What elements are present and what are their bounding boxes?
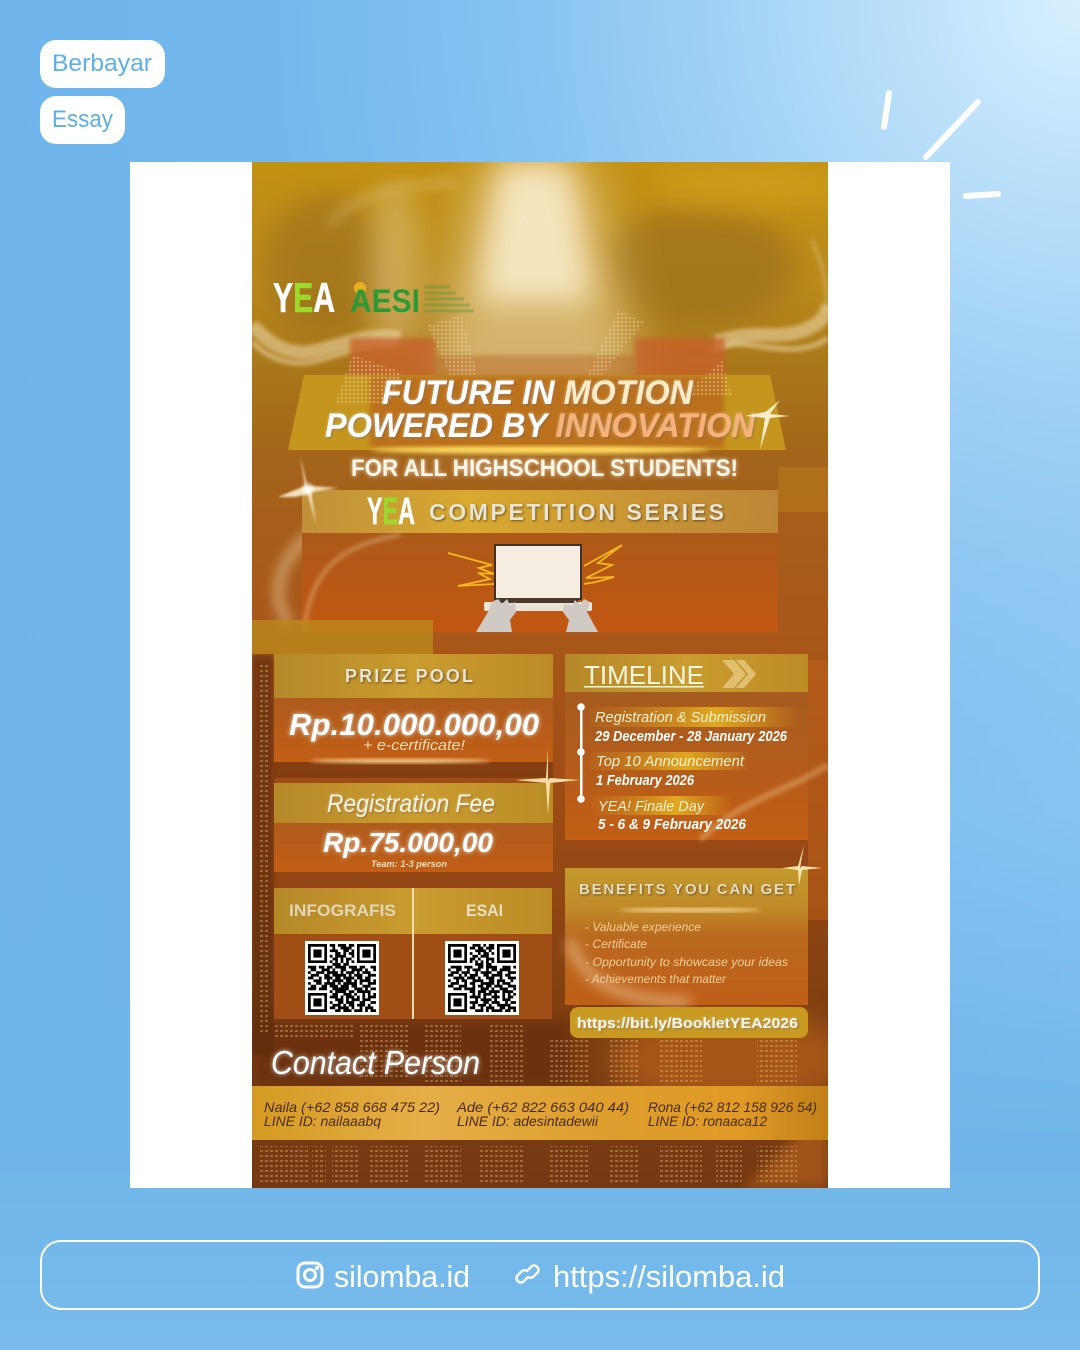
contact heading: Contact Person [271,1044,480,1081]
contact: Rona [648,1102,816,1126]
booklet link [570,1007,808,1038]
panel: prize pool [274,654,553,778]
icon: chevrons [722,660,756,688]
panel: competition series [302,490,778,632]
panel: timeline [565,654,828,840]
timeline entries: 29 December - 28 January 2026 [594,729,788,745]
tag: Essay: Essay [52,106,113,133]
poster background [252,161,850,1188]
tag: Essay [40,96,125,144]
booklet link: https://bit.ly/BookletYEA2026 [577,1015,798,1032]
contact: Naila: Naila (+62 858 668 475 22) [264,1099,440,1115]
contact: Rona: LINE ID: ronaaca12 [648,1113,767,1129]
dotted matrix pattern [258,665,797,1184]
logo: YEA: YEA [273,274,335,321]
halftone shapes behind title [348,310,728,375]
logo: AESI [350,282,474,312]
benefit list: - Opportunity to showcase your ideas [585,955,788,969]
tag: Berbayar [40,40,165,88]
icon: link [517,1266,538,1282]
contact: Ade [456,1102,628,1126]
url: https://silomba.id [553,1259,785,1294]
sparkles [278,400,822,885]
benefit list: - Achievements that matter [585,972,727,986]
timeline entries: Registration & Submission [595,709,766,726]
title text [324,378,757,440]
light beam [369,162,650,430]
panel: QR links: ESAI [466,901,503,920]
benefit list [585,920,788,986]
handle: silomba.id [334,1259,470,1294]
footer link bar [41,1241,1039,1309]
icon: laptop with hands [448,544,622,632]
panel: registration fee: Team: 1-3 person [371,859,447,869]
contact: Naila: LINE ID: nailaaabq [264,1113,381,1129]
title text: FUTURE IN MOTION [382,374,694,412]
logo: AESI: AESI [350,283,420,319]
QR code: infografis [305,941,379,1015]
panel: competition series: YEA [367,491,415,533]
icon: instagram [298,1263,322,1287]
timeline entries: YEA! Finale Day [598,798,705,815]
panel: timeline: TIMELINE [584,660,704,690]
panel: prize pool: PRIZE POOL [345,666,473,686]
left band [252,620,433,654]
contact: Ade: Ade (+62 822 663 040 44) [456,1099,629,1115]
panel: QR links [274,888,552,1019]
title banner [288,355,786,454]
highlight bars [590,707,800,815]
title text: POWERED BY INNOVATION [325,407,756,445]
timeline entries: 5 - 6 & 9 February 2026 [598,817,747,833]
timeline line [577,703,585,803]
QR code: esai [445,941,519,1015]
contact: Ade: LINE ID: adesintadewii [457,1113,599,1129]
white image card [130,162,950,1188]
sub heading: FOR ALL HIGHSCHOOL STUDENTS! [351,455,738,482]
gold waves [252,182,828,625]
contact: Naila [264,1102,440,1129]
panel: registration fee: Rp.75.000,00 [323,827,493,858]
contact band [252,1086,828,1140]
benefit list: - Valuable experience [585,920,701,934]
panel: QR links: INFOGRAFIS [289,901,396,920]
benefit list: - Certificate [585,937,647,951]
panel: registration fee: Registration Fee [327,790,495,818]
tag: Berbayar: Berbayar [52,50,152,77]
timeline entries [594,709,788,833]
panel: prize pool: Rp.10.000.000,00 [289,707,539,742]
contact: Rona: Rona (+62 812 158 926 54) [648,1099,817,1115]
side band [778,467,828,512]
decorative spark strokes [884,93,998,196]
poster [252,161,850,1188]
panel: benefits [565,868,808,1005]
timeline entries: Top 10 Announcement [596,753,745,770]
panel: benefits: BENEFITS YOU CAN GET [579,881,795,898]
timeline entries: 1 February 2026 [596,773,695,789]
panel: registration fee [274,783,553,872]
panel: prize pool: + e-certificate! [363,737,466,754]
panel: competition series: COMPETITION SERIES [429,499,724,525]
